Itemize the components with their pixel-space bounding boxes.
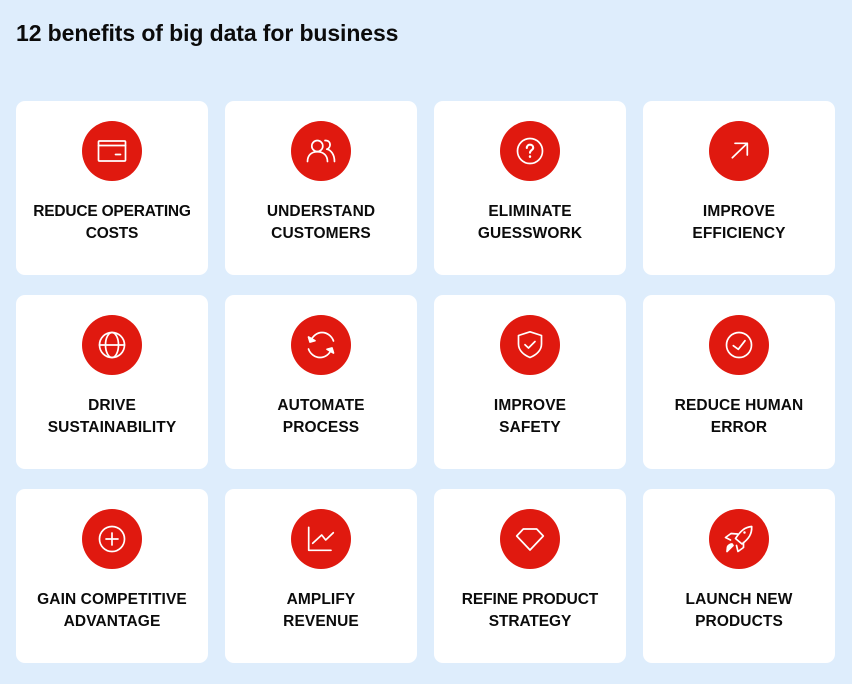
label: AUTOMATE <box>277 397 365 414</box>
panel: amplify revenue <box>225 489 417 663</box>
label <box>48 397 176 436</box>
icon: people <box>291 121 351 181</box>
label <box>33 203 191 242</box>
label: SAFETY <box>499 419 561 436</box>
label <box>267 203 375 242</box>
label: COSTS <box>86 225 138 242</box>
icon: gem <box>500 509 560 569</box>
icon: globe <box>82 315 142 375</box>
panel: automate process <box>225 295 417 469</box>
label: GUESSWORK <box>478 225 582 242</box>
panel: launch new products <box>643 489 835 663</box>
panel: drive sustainability <box>16 295 208 469</box>
panel: eliminate guesswork <box>434 101 626 275</box>
label <box>494 397 566 436</box>
icon: question mark <box>500 121 560 181</box>
panel: gain competitive advantage <box>16 489 208 663</box>
label <box>277 397 365 436</box>
label: REVENUE <box>283 613 359 630</box>
icon: rocket <box>709 509 769 569</box>
icon: shield <box>500 315 560 375</box>
label <box>675 397 803 436</box>
icon: sync arrows <box>291 315 351 375</box>
label <box>692 203 786 242</box>
icon: line chart <box>291 509 351 569</box>
label: REDUCE OPERATING <box>33 203 191 220</box>
label <box>478 203 582 242</box>
panel: reduce human error <box>643 295 835 469</box>
icon: check circle <box>709 315 769 375</box>
label: GAIN COMPETITIVE <box>37 591 187 608</box>
panel: improve safety <box>434 295 626 469</box>
icon: arrow up right <box>709 121 769 181</box>
label: AMPLIFY <box>287 591 355 608</box>
label: EFFICIENCY <box>692 225 786 242</box>
label: IMPROVE <box>703 203 775 220</box>
label: REFINE PRODUCT <box>462 591 598 608</box>
title: 12 benefits of big data for business <box>16 20 398 46</box>
label: REDUCE HUMAN <box>675 397 803 414</box>
label: SUSTAINABILITY <box>48 419 176 436</box>
panel: reduce operating costs <box>16 101 208 275</box>
panel: refine product strategy <box>434 489 626 663</box>
label <box>462 591 598 630</box>
icon: plus circle <box>82 509 142 569</box>
label <box>283 591 359 630</box>
label: PRODUCTS <box>695 613 783 630</box>
label: DRIVE <box>88 397 136 414</box>
label: ERROR <box>711 419 767 436</box>
panel: improve efficiency <box>643 101 835 275</box>
label: LAUNCH NEW <box>686 591 792 608</box>
label: STRATEGY <box>489 613 571 630</box>
label: CUSTOMERS <box>271 225 371 242</box>
panel: understand customers <box>225 101 417 275</box>
label: PROCESS <box>283 419 359 436</box>
icon: credit card <box>82 121 142 181</box>
label <box>37 591 187 630</box>
label <box>686 591 792 630</box>
label: IMPROVE <box>494 397 566 414</box>
label: ELIMINATE <box>488 203 572 220</box>
label: ADVANTAGE <box>64 613 160 630</box>
label: UNDERSTAND <box>267 203 375 220</box>
